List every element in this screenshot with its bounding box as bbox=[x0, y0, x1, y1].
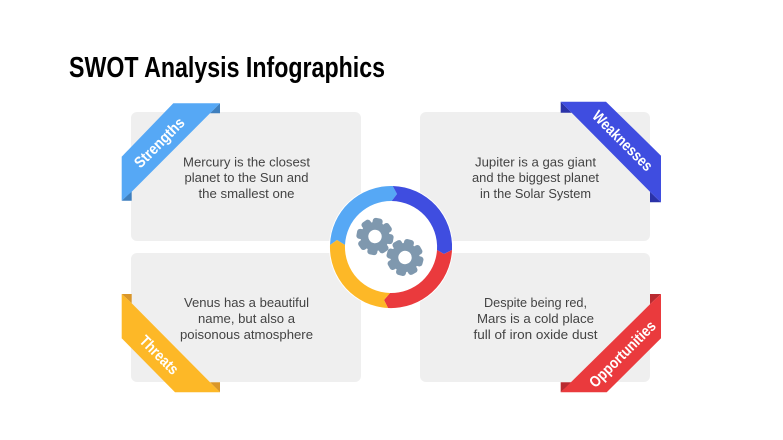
icon: left gear bbox=[354, 215, 396, 258]
title: SWOT Analysis Infographics bbox=[69, 52, 385, 84]
text: weaknesses: in the Solar System bbox=[480, 186, 591, 201]
ribbon: opportunities: Opportunities bbox=[586, 318, 660, 391]
ribbon: threats: Threats bbox=[136, 332, 182, 378]
card: opportunities bbox=[420, 253, 650, 382]
text: strengths: planet to the Sun and bbox=[184, 170, 308, 185]
ring segment: red bbox=[384, 250, 452, 308]
ribbon: strengths bbox=[122, 103, 220, 201]
text: weaknesses: Jupiter is a gas giant bbox=[475, 154, 596, 170]
panel: threats bbox=[122, 253, 361, 392]
text: weaknesses bbox=[472, 154, 599, 201]
card: weaknesses bbox=[420, 112, 650, 241]
text: opportunities bbox=[474, 295, 598, 342]
text: threats: name, but also a bbox=[198, 311, 296, 326]
ribbon: weaknesses bbox=[561, 102, 661, 202]
text: strengths: Mercury is the closest bbox=[183, 154, 310, 170]
text: threats: Venus has a beautiful bbox=[184, 295, 309, 310]
ribbon: weaknesses: Weaknesses bbox=[588, 108, 656, 175]
panel: weaknesses bbox=[420, 102, 661, 241]
text: opportunities: Despite being red, bbox=[484, 295, 587, 310]
icon: right gear bbox=[382, 235, 428, 280]
ribbon: strengths: Strengths bbox=[131, 114, 188, 172]
ribbon: opportunities bbox=[561, 294, 661, 392]
text: threats: poisonous atmosphere bbox=[180, 327, 313, 342]
central ring diagram bbox=[329, 185, 453, 309]
text: threats bbox=[180, 295, 313, 342]
ring segment: dark blue bbox=[392, 186, 452, 254]
text: strengths bbox=[183, 154, 310, 201]
panel: strengths bbox=[122, 103, 361, 241]
card: threats bbox=[131, 253, 361, 382]
text: opportunities: full of iron oxide dust bbox=[474, 327, 598, 342]
ring segment: yellow bbox=[330, 240, 390, 308]
ring segment: light blue bbox=[330, 186, 397, 245]
ribbon: threats bbox=[122, 294, 220, 392]
text: weaknesses: and the biggest planet bbox=[472, 170, 599, 185]
panel: opportunities bbox=[420, 253, 661, 392]
card: strengths bbox=[131, 112, 361, 241]
text: strengths: the smallest one bbox=[198, 186, 294, 201]
text: opportunities: Mars is a cold place bbox=[477, 311, 594, 326]
